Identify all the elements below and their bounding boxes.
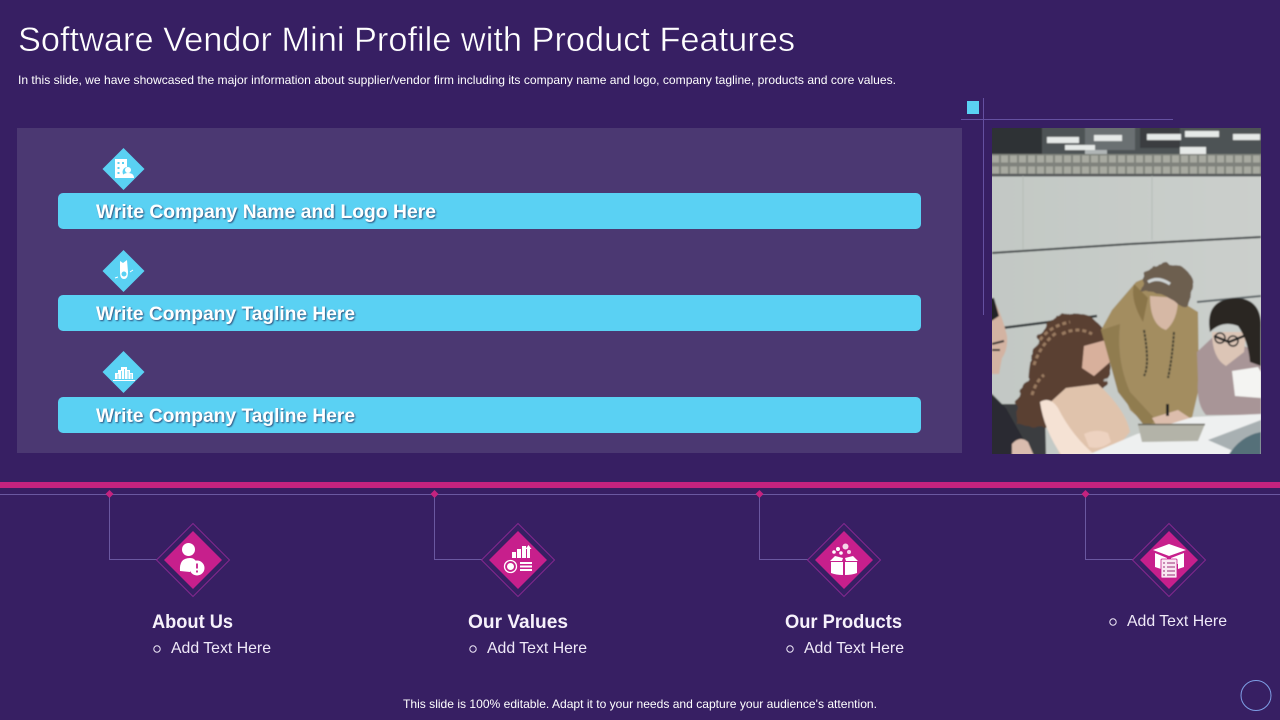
- bar: company name: [58, 193, 921, 229]
- item: our products: [785, 524, 904, 657]
- bullet text: about us: Add Text Here: [171, 640, 271, 657]
- bar: company tagline two: Write Company Tagline Here: [96, 406, 355, 427]
- item: about us: [152, 524, 271, 657]
- icon: tagline badge: [102, 250, 144, 292]
- photo: team around a tablet: [990, 126, 1263, 456]
- bullet text: our products: Add Text Here: [804, 640, 904, 657]
- footer note: This slide is 100% editable. Adapt it to your needs and capture your audience's attention.: [403, 697, 877, 711]
- right woman: [1197, 336, 1261, 415]
- divider: pink band: [0, 482, 1280, 488]
- item: fourth feature: [1110, 524, 1227, 630]
- panel: company details: [17, 128, 962, 453]
- icon: city buildings: [102, 351, 144, 393]
- bar: company name: Write Company Name and Logo Here: [96, 202, 436, 223]
- heading: our products: Our Products: [785, 612, 902, 633]
- bar: company tagline one: Write Company Tagline Here: [96, 304, 355, 325]
- subtitle text: In this slide, we have showcased the major information about supplier/vendor firm including its company name and logo, company tagline, products and core values.: [18, 73, 896, 87]
- table and tablet: [1086, 413, 1261, 454]
- bullet text: our values: Add Text Here: [487, 640, 587, 657]
- decorative accent: square with crossing lines: [961, 98, 1173, 315]
- left woman face: [1082, 340, 1110, 376]
- icon: chart and coin: [482, 524, 554, 596]
- timeline with connectors: [0, 490, 1280, 560]
- heading: our values: Our Values: [468, 612, 568, 633]
- left man: [992, 305, 1008, 374]
- left woman body: [1044, 384, 1130, 456]
- bullet text: fourth feature: Add Text Here: [1127, 613, 1227, 630]
- navigation circle: [1241, 680, 1271, 710]
- dark floor behind: [1000, 404, 1046, 456]
- icon: box with checklist: [1132, 524, 1206, 596]
- bar: company tagline two: [58, 397, 921, 433]
- standing person hoodie: [1101, 276, 1199, 428]
- icon: company building with person: [102, 148, 144, 190]
- bar: company tagline one: [58, 295, 921, 331]
- title: Software Vendor Mini Profile with Product Features: [18, 21, 795, 59]
- heading: about us: About Us: [152, 612, 233, 633]
- icon: person with alert: [156, 524, 230, 596]
- left woman hair: [1016, 313, 1110, 428]
- icon: open box: [808, 524, 880, 596]
- item: our values: [468, 524, 587, 657]
